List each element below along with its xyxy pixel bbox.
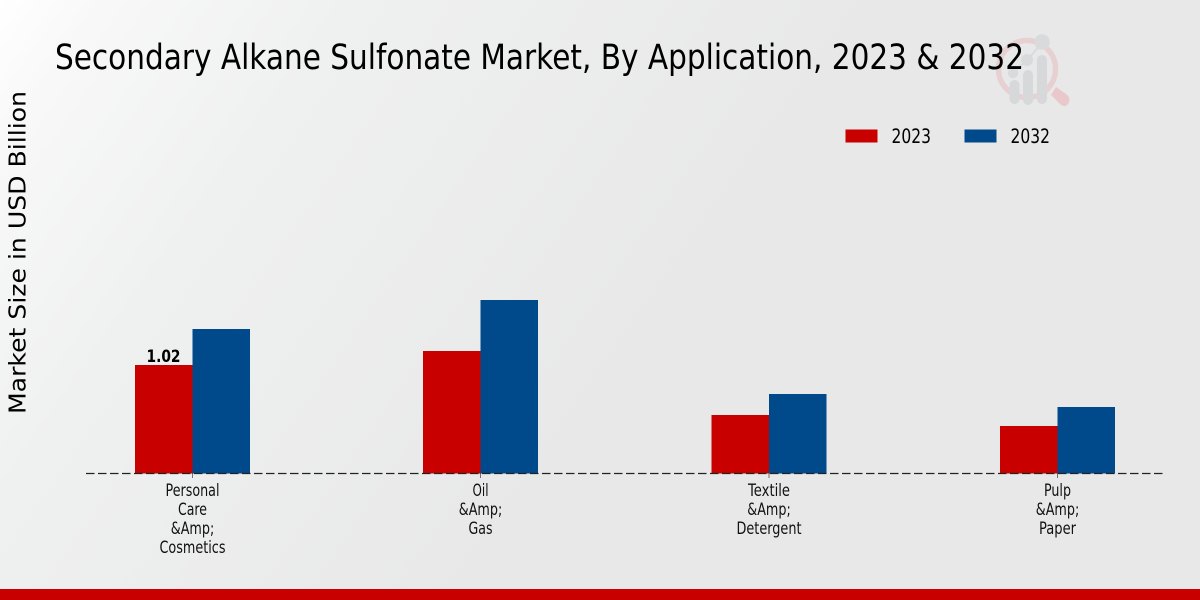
- value label: 1.02: [146, 347, 180, 366]
- bar chart: [135, 300, 1115, 474]
- legend item: 2023: 2023: [892, 125, 931, 148]
- category label: Pulp & Paper: &Amp;: [1036, 500, 1079, 519]
- category label: Personal Care & Cosmetics: Personal: [166, 481, 220, 500]
- x-axis labels: [160, 481, 1079, 557]
- category label: Personal Care & Cosmetics: [160, 481, 226, 557]
- title: Secondary Alkane Sulfonate Market, By Application, 2023 & 2032: [55, 38, 1024, 78]
- bars: Oil & Gas: [423, 300, 538, 474]
- category label: Personal Care & Cosmetics: Cosmetics: [160, 538, 226, 557]
- category label: Textile & Detergent: &Amp;: [747, 500, 791, 519]
- category label: Oil & Gas: &Amp;: [459, 500, 502, 519]
- bars: Textile & Detergent: [712, 394, 826, 474]
- category label: Pulp & Paper: [1036, 481, 1079, 538]
- legend item: 2032: 2032: [1010, 125, 1050, 148]
- category label: Oil & Gas: Gas: [468, 519, 492, 538]
- category label: Textile & Detergent: Textile: [747, 481, 790, 500]
- y-axis label: Market Size in USD Billion: [6, 91, 32, 414]
- category label: Oil & Gas: Oil: [472, 481, 488, 500]
- x-axis baseline: [86, 473, 1164, 478]
- category label: Pulp & Paper: Pulp: [1044, 481, 1071, 500]
- category label: Personal Care & Cosmetics: Care: [178, 500, 207, 519]
- legend item: 2032: [964, 125, 1050, 148]
- category label: Pulp & Paper: Paper: [1039, 519, 1076, 538]
- category label: Textile & Detergent: Detergent: [736, 519, 802, 538]
- legend: [846, 125, 1050, 148]
- bars: Personal Care & Cosmetics: [135, 329, 250, 474]
- category label: Oil & Gas: [459, 481, 502, 538]
- category label: Textile & Detergent: [736, 481, 802, 538]
- bottom red band: [0, 589, 1200, 600]
- legend item: 2023: [846, 125, 931, 148]
- bars: Pulp & Paper: [1000, 407, 1115, 474]
- icon: watermark logo: [998, 34, 1070, 106]
- category label: Personal Care & Cosmetics: &Amp;: [171, 519, 214, 538]
